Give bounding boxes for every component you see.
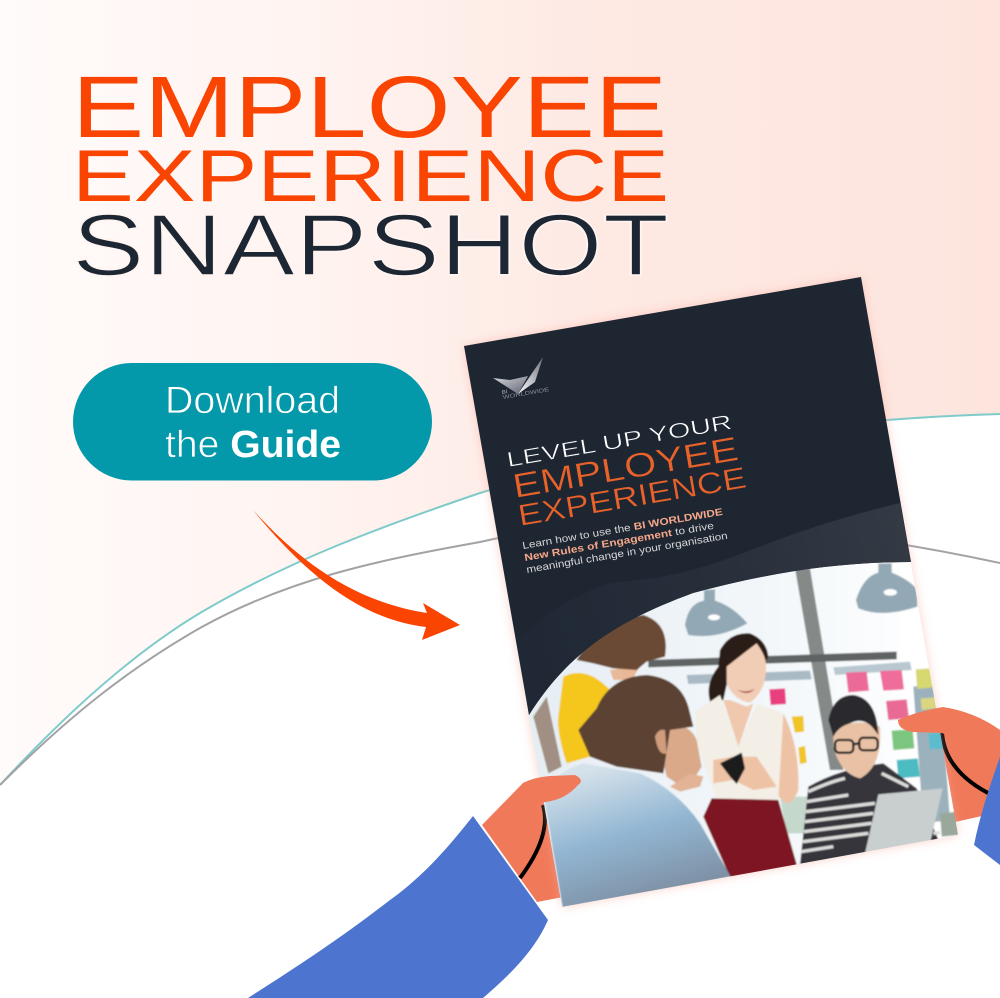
- teal curve line: [0, 414, 1000, 785]
- logo: BI: [501, 389, 508, 396]
- title: SNAPSHOT: [72, 197, 669, 294]
- booklet: [464, 277, 973, 927]
- lamps: [685, 589, 747, 636]
- download button: [73, 363, 432, 480]
- cover body text: Learn how to use the BI WORLDWIDE: [522, 507, 724, 552]
- logo: WORLDWIDE: [502, 387, 550, 401]
- left hand palm: [482, 777, 600, 902]
- woman in yellow: [558, 673, 610, 763]
- logo: [493, 357, 550, 401]
- cover heading: EXPERIENCE: [516, 461, 749, 533]
- cover heading: LEVEL UP YOUR: [505, 411, 734, 472]
- right thumb: [898, 707, 1000, 760]
- left sleeve: [248, 816, 548, 998]
- cover body text: New Rules of Engagement to drive: [524, 521, 715, 564]
- download button: the Guide: [165, 424, 341, 466]
- cover heading: [505, 411, 749, 533]
- title: EMPLOYEE: [72, 59, 667, 156]
- grey curve line: [0, 523, 1000, 785]
- title: EXPERIENCE: [72, 136, 669, 217]
- cover body text: [522, 507, 729, 576]
- cover: [464, 277, 911, 715]
- right sleeve: [974, 757, 1000, 865]
- sticky notes: [846, 672, 869, 692]
- cover body text: meaningful change in your organisation: [526, 531, 729, 576]
- left thumb: [500, 775, 581, 815]
- white curved area: [0, 414, 1000, 998]
- booklet shadow: [464, 277, 958, 907]
- right hand palm: [925, 715, 1000, 822]
- arrow: [253, 510, 460, 640]
- man right: [800, 763, 940, 865]
- man left: [545, 763, 731, 907]
- title: [72, 59, 669, 294]
- woman centre: [709, 633, 768, 702]
- cover heading: EMPLOYEE: [510, 430, 741, 506]
- download button: Download: [165, 380, 340, 422]
- photo: [500, 552, 958, 907]
- cover band: [517, 503, 911, 715]
